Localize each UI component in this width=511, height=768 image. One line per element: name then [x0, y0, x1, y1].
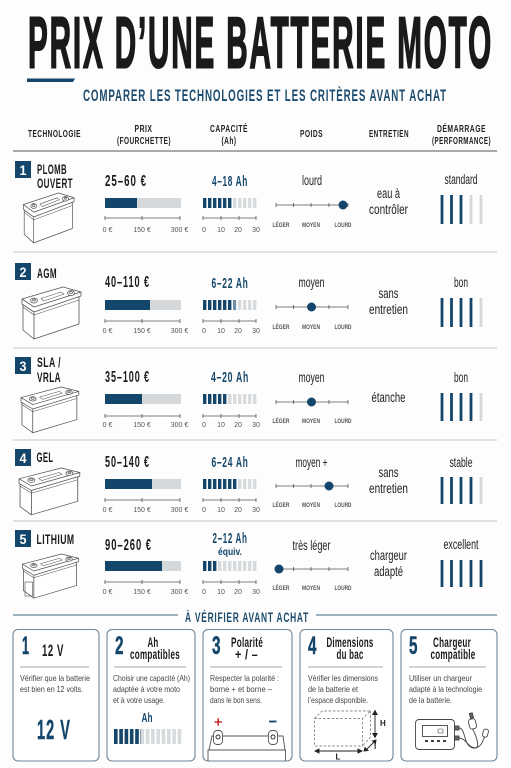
- technology name: [37, 355, 61, 385]
- technology name: GEL: [36, 450, 54, 465]
- table header: [28, 122, 491, 147]
- capacity: 20: [234, 422, 242, 429]
- starting performance: [442, 275, 481, 327]
- badge 3: [15, 357, 31, 374]
- badge 4: 4: [20, 450, 27, 466]
- card title: Dimensions: [326, 634, 374, 650]
- price range: 150 €: [133, 589, 151, 596]
- card title: 12 V: [42, 641, 64, 660]
- capacity: [202, 530, 260, 596]
- capacity: 6–22 Ah: [212, 275, 248, 292]
- icon: dimensions box: l: [374, 742, 376, 751]
- weight scale: LÉGER: [272, 220, 290, 229]
- row 2: AGM: [15, 263, 481, 339]
- card text: Vérifier que la batterie: [20, 673, 90, 683]
- capacity: 20: [234, 328, 242, 335]
- capacity: [202, 454, 260, 514]
- card title: Chargeur: [433, 634, 471, 650]
- maintenance: [369, 465, 408, 496]
- card title: [231, 634, 263, 662]
- price range: 50–140 €: [105, 454, 150, 471]
- capacity: 20: [234, 589, 242, 596]
- card title: Ah: [148, 634, 158, 650]
- card number: 1: [22, 632, 29, 660]
- capacity: 30: [252, 227, 260, 234]
- weight scale: LÉGER: [272, 500, 290, 509]
- price range: 40–110 €: [105, 274, 150, 291]
- technology name: [37, 162, 73, 191]
- starting performance: [442, 537, 481, 587]
- badge 5: 5: [20, 531, 27, 547]
- capacity: 0: [202, 507, 206, 514]
- card number: 2: [115, 632, 124, 660]
- card text: est bien en 12 volts.: [20, 684, 83, 694]
- capacity: 10: [217, 328, 225, 335]
- weight scale: LÉGER: [272, 583, 290, 592]
- price range: 300 €: [171, 227, 188, 234]
- weight scale: très léger: [292, 538, 331, 553]
- weight scale: MOYEN: [302, 585, 320, 592]
- icon: battery: [21, 387, 79, 433]
- price range: 0 €: [103, 227, 112, 234]
- price range: 150 €: [133, 422, 151, 429]
- weight scale: MOYEN: [302, 324, 320, 331]
- weight scale: [272, 275, 352, 331]
- starting performance: [442, 172, 481, 224]
- polarity battery: [208, 718, 286, 761]
- card title: + / –: [235, 646, 258, 662]
- technology name: PLOMB: [37, 162, 67, 177]
- weight scale: [272, 455, 352, 509]
- price range: 150 €: [133, 328, 151, 335]
- maintenance: adapté: [374, 564, 403, 579]
- price range: 300 €: [171, 507, 188, 514]
- starting performance: [442, 370, 481, 421]
- weight scale: LOURD: [334, 585, 352, 592]
- capacity: 0: [202, 589, 206, 596]
- card 2: Ah compatibles: [107, 630, 195, 761]
- card title: [130, 634, 180, 662]
- maintenance: sans: [378, 465, 399, 480]
- weight scale: moyen: [298, 370, 324, 385]
- table header: PRIX: [134, 124, 152, 135]
- price range: 90–260 €: [105, 537, 152, 554]
- weight scale: moyen: [298, 275, 324, 290]
- icon: dimensions box: [314, 710, 386, 762]
- capacity: 30: [252, 328, 260, 335]
- card title: compatibles: [130, 646, 180, 662]
- card text: Choisir une capacité (Ah): [113, 673, 190, 683]
- table header: DÉMARRAGE: [437, 122, 486, 135]
- starting performance: bon: [454, 370, 468, 385]
- row 1: plomb ouvert: [15, 161, 481, 243]
- weight scale: [272, 538, 352, 592]
- card text: [113, 673, 190, 705]
- maintenance: entretien: [369, 481, 408, 496]
- large 12 V: 12 V: [37, 714, 71, 745]
- row 3: SLA / VRLA: [15, 355, 481, 433]
- icon: dimensions box: L: [336, 752, 341, 762]
- badge 1: 1: [20, 162, 27, 178]
- badge 2: 2: [20, 264, 27, 280]
- price range: 150 €: [133, 507, 151, 514]
- maintenance: contrôler: [369, 202, 408, 217]
- maintenance: entretien: [369, 302, 408, 317]
- icon: lithium battery: [22, 554, 78, 598]
- weight scale: [272, 173, 352, 229]
- card text: Respecter la polarité :: [210, 673, 279, 683]
- card 5: chargeur compatible: [401, 630, 497, 761]
- weight scale: LOURD: [334, 324, 352, 331]
- price range: [103, 173, 188, 234]
- table header: ENTRETIEN: [369, 129, 409, 140]
- card text: de la batterie et: [308, 684, 359, 694]
- capacity: 10: [217, 422, 225, 429]
- table header: TECHNOLOGIE: [28, 129, 81, 140]
- card number: 4: [308, 632, 317, 660]
- capacity: [202, 369, 260, 429]
- price range: [103, 369, 188, 429]
- card 1: 12 V: [13, 630, 99, 761]
- icon: battery: [23, 193, 74, 243]
- technology name: SLA /: [37, 355, 61, 370]
- price range: 25–60 €: [105, 173, 147, 190]
- card number: 5: [409, 632, 418, 660]
- capacity: 30: [252, 422, 260, 429]
- row 4: gel: [15, 449, 481, 515]
- starting performance: excellent: [444, 537, 479, 552]
- icon: dimensions box: H: [380, 719, 386, 728]
- card title: Polarité: [231, 634, 263, 650]
- title accent bar: [27, 78, 75, 82]
- starting performance: standard: [444, 172, 478, 187]
- card text: [308, 673, 378, 705]
- card number: 3: [212, 632, 220, 660]
- card 4: dimensions du bac: [300, 630, 393, 762]
- maintenance: chargeur: [370, 548, 407, 563]
- price range: 0 €: [103, 422, 112, 429]
- card text: Vérifier les dimensions: [308, 673, 378, 683]
- maintenance: [369, 186, 408, 217]
- capacity: [202, 173, 260, 234]
- capacity: 30: [252, 589, 260, 596]
- capacity: 6–24 Ah: [212, 454, 248, 471]
- table header: (FOURCHETTE): [117, 136, 171, 147]
- maintenance: [370, 548, 407, 579]
- badge 3: 3: [20, 358, 27, 374]
- card text: adaptée à votre moto: [113, 684, 180, 694]
- card text: [210, 673, 279, 705]
- price range: 300 €: [171, 328, 188, 335]
- capacity gauge: Ah: [142, 710, 153, 725]
- weight scale: moyen +: [296, 455, 328, 470]
- price range: 150 €: [133, 227, 151, 234]
- maintenance: [369, 286, 408, 317]
- checklist heading: À VÉRIFIER AVANT ACHAT: [185, 610, 309, 625]
- card title: [430, 634, 476, 662]
- technology name: OUVERT: [37, 176, 73, 191]
- capacity: 30: [252, 507, 260, 514]
- capacity: 0: [202, 227, 206, 234]
- capacity: 10: [217, 507, 225, 514]
- weight scale: MOYEN: [302, 418, 320, 425]
- icon: battery: [22, 287, 81, 339]
- weight scale: [272, 370, 352, 425]
- technology name: LITHIUM: [36, 532, 74, 547]
- capacity: 20: [234, 507, 242, 514]
- capacity: équiv.: [218, 546, 242, 558]
- card text: Utiliser un chargeur: [409, 673, 472, 683]
- capacity: [202, 275, 260, 335]
- price range: 0 €: [103, 507, 112, 514]
- weight scale: LOURD: [334, 222, 352, 229]
- badge 4: [15, 449, 31, 466]
- capacity: 10: [217, 227, 225, 234]
- capacity: 20: [234, 227, 242, 234]
- price range: 0 €: [103, 328, 112, 335]
- price range: 300 €: [171, 422, 188, 429]
- price range: 0 €: [103, 589, 112, 596]
- weight scale: LÉGER: [272, 322, 290, 331]
- row 5: lithium: [15, 530, 481, 598]
- card text: dans le bon sens.: [210, 695, 262, 705]
- card text: [20, 673, 90, 694]
- icon: charger: [416, 713, 489, 750]
- card text: [409, 673, 482, 705]
- card text: adapté à la technologie: [409, 684, 482, 694]
- price range: [103, 537, 188, 596]
- weight scale: MOYEN: [302, 222, 320, 229]
- capacity: 10: [217, 589, 225, 596]
- card text: l’espace disponible.: [308, 695, 368, 705]
- price range: 35–100 €: [105, 369, 150, 386]
- weight scale: lourd: [302, 173, 322, 188]
- weight scale: LOURD: [334, 502, 352, 509]
- capacity: 0: [202, 328, 206, 335]
- starting performance: bon: [454, 275, 468, 290]
- badge 2: [15, 263, 31, 280]
- card text: de la batterie.: [409, 695, 452, 705]
- capacity: 2–12 Ah: [212, 530, 248, 547]
- card title: du bac: [336, 646, 364, 662]
- capacity: 4–18 Ah: [212, 173, 248, 190]
- starting performance: [442, 455, 481, 504]
- card text: borne + et borne –: [210, 684, 272, 694]
- technology name: VRLA: [37, 370, 61, 385]
- weight scale: LOURD: [334, 418, 352, 425]
- icon: battery: [19, 468, 80, 515]
- card title: compatible: [430, 646, 476, 662]
- table header: CAPACITÉ: [210, 122, 248, 135]
- price range: [103, 454, 188, 514]
- maintenance: étanche: [372, 390, 406, 405]
- price range: [103, 274, 188, 335]
- badge 1: [15, 161, 31, 178]
- card text: et à votre usage.: [113, 695, 165, 705]
- price range: 300 €: [171, 589, 188, 596]
- weight scale: MOYEN: [302, 502, 320, 509]
- starting performance: stable: [450, 455, 472, 470]
- maintenance: eau à: [377, 186, 400, 201]
- table header: POIDS: [300, 129, 323, 140]
- table header: (Ah): [222, 136, 236, 147]
- badge 5: [15, 530, 31, 547]
- technology name: AGM: [37, 266, 57, 281]
- card title: [326, 634, 374, 662]
- capacity: 4–20 Ah: [211, 369, 249, 386]
- maintenance: sans: [378, 286, 399, 301]
- weight scale: LÉGER: [272, 416, 290, 425]
- card 3: polarité: [203, 630, 292, 761]
- capacity: 0: [202, 422, 206, 429]
